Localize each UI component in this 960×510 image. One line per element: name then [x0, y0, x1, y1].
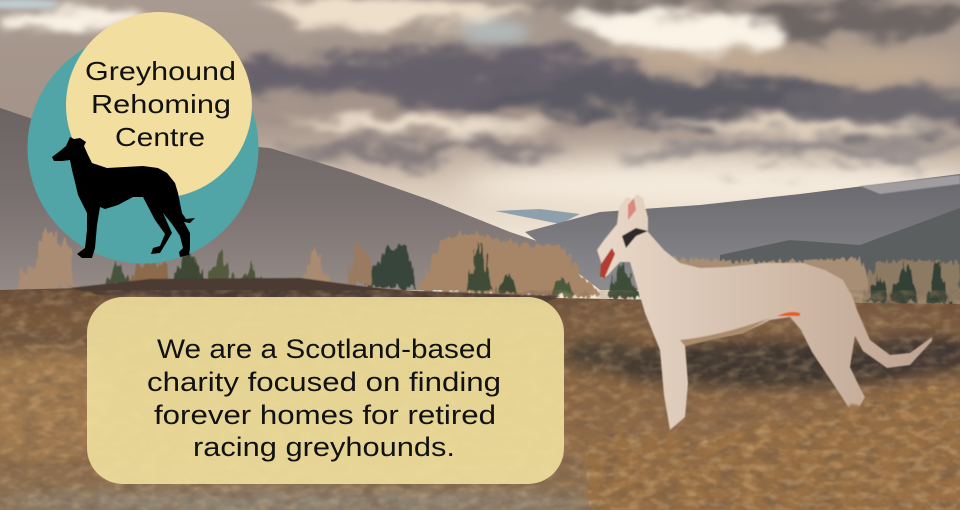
logo title: Centre — [115, 122, 205, 152]
foreground brush — [570, 380, 960, 510]
logo — [28, 12, 258, 264]
logo teal circle — [28, 32, 258, 264]
logo title — [85, 56, 236, 152]
photo background: mountains — [0, 108, 960, 290]
description panel — [87, 297, 564, 484]
logo title: Rehoming — [91, 89, 231, 119]
description text: charity focused on finding — [147, 367, 501, 397]
description text: racing greyhounds. — [193, 432, 455, 462]
photo background: moorland ground — [0, 278, 960, 510]
greyhound in the photo — [597, 194, 932, 430]
photo background: sky — [0, 0, 960, 300]
description text: forever homes for retired — [154, 400, 496, 430]
description text — [147, 334, 501, 462]
description text: We are a Scotland-based — [157, 334, 492, 364]
photo background: tree line — [16, 230, 960, 306]
icon: greyhound silhouette — [52, 137, 195, 258]
logo cream circle — [66, 12, 252, 198]
logo title: Greyhound — [85, 56, 236, 86]
